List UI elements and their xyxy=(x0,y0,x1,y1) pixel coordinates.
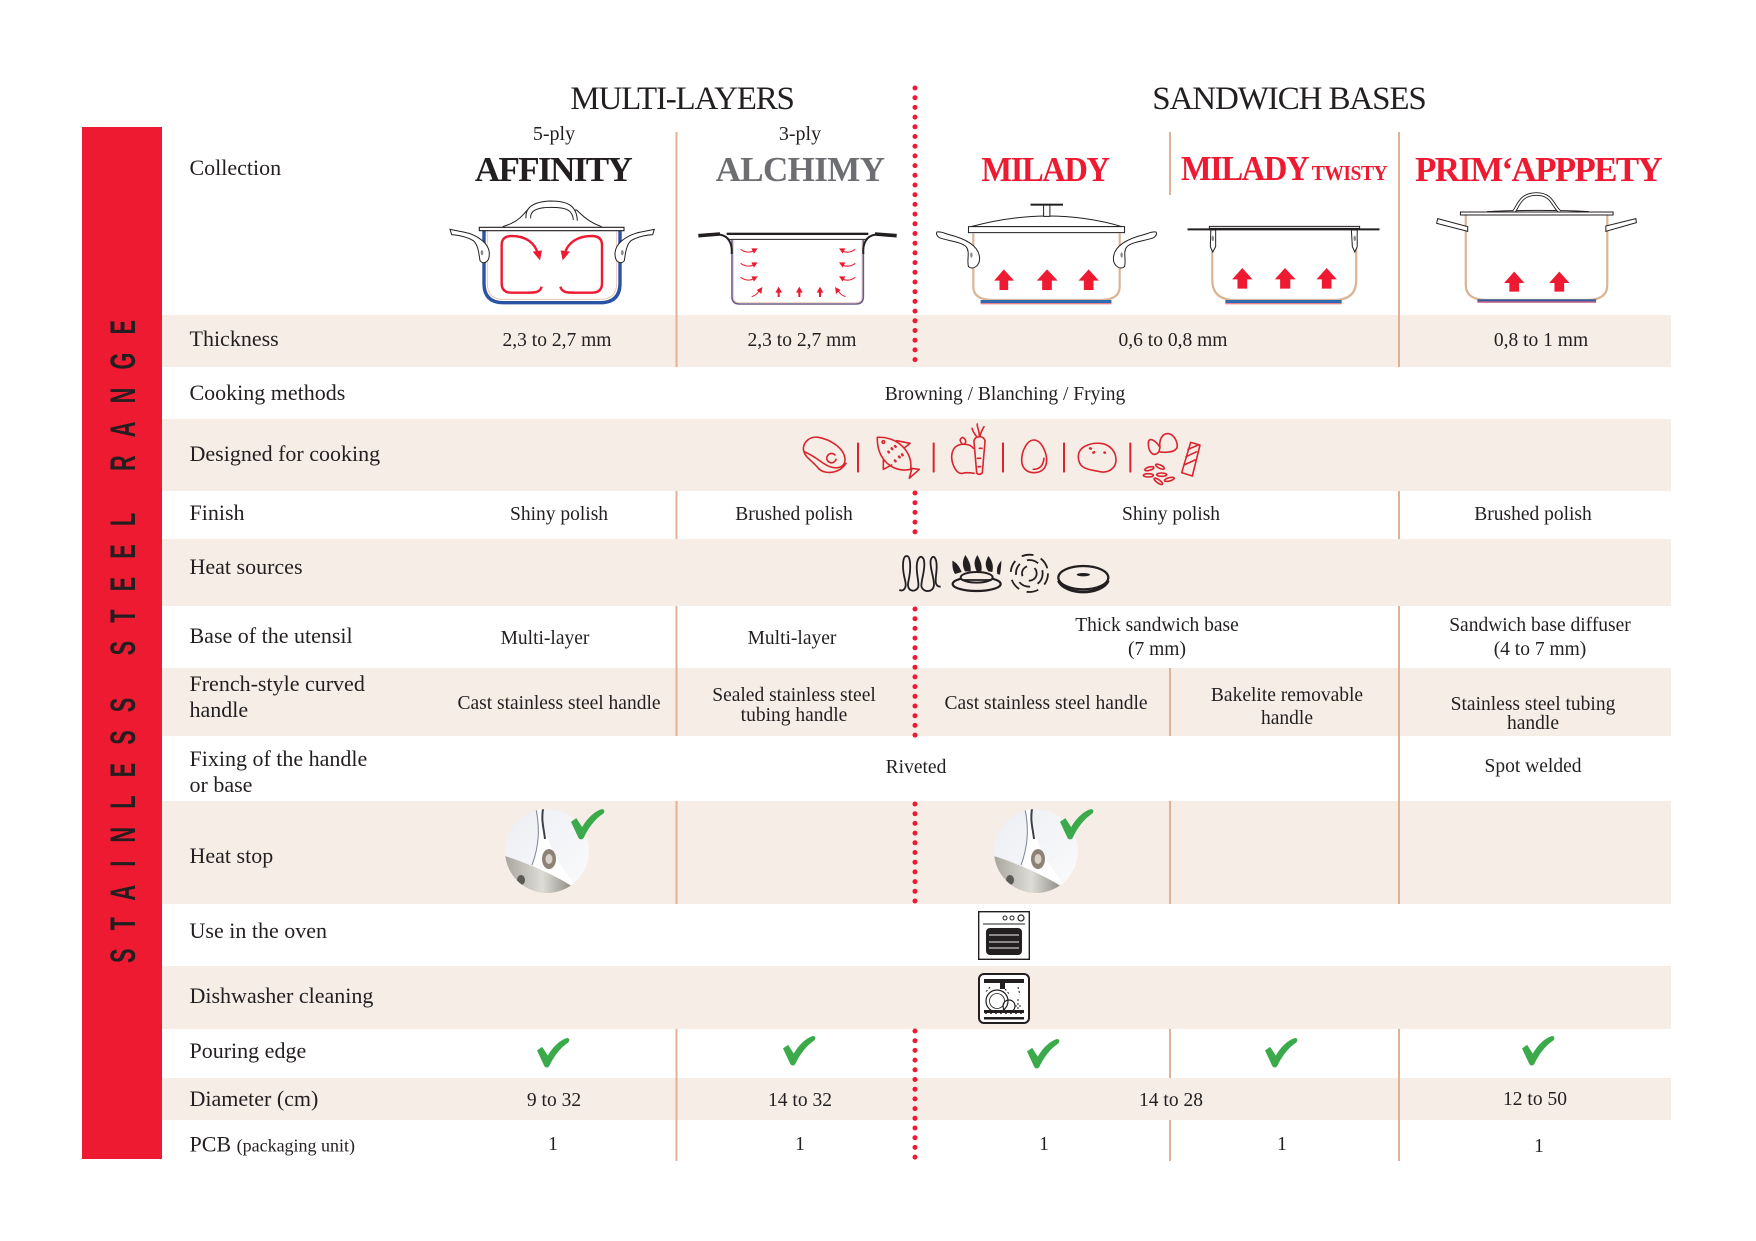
base: affinity: Multi-layer xyxy=(501,628,589,649)
icon: solid plate xyxy=(1058,566,1108,592)
food icons xyxy=(802,423,1201,486)
check: heat stop affinity xyxy=(571,809,604,840)
label: french-style curved handle: French-style curved xyxy=(190,671,365,696)
check: pouring edge affinity xyxy=(537,1038,570,1068)
fixing: spot welded: Spot welded xyxy=(1485,756,1581,777)
handle: prim'apppety xyxy=(1451,694,1615,734)
brand: alchimy: ALCHIMY xyxy=(716,150,884,189)
heat source icons xyxy=(899,554,1110,594)
pots: sandwich base illustrations xyxy=(936,192,1637,304)
base: milady xyxy=(1075,615,1239,660)
photo: heat stop milady xyxy=(994,809,1078,893)
sub-heading: 3-ply: 3-ply xyxy=(779,123,821,145)
sub-heading: 5-ply: 5-ply xyxy=(533,123,575,145)
row band: thickness xyxy=(162,315,1671,367)
check: pouring edge milady xyxy=(1027,1039,1060,1068)
row band: heat stop xyxy=(162,801,1671,904)
handle: alchimy: Sealed stainless steel xyxy=(712,685,876,706)
pcb: affinity: 1 xyxy=(548,1134,558,1155)
fixing: riveted: Riveted xyxy=(886,757,946,778)
row band: french-style curved handle xyxy=(162,668,1671,736)
thickness: alchimy: 2,3 to 2,7 mm xyxy=(748,330,856,351)
side banner: stainless steel range: STAINLESS STEEL RANGE xyxy=(105,320,143,963)
diameter: prim'apppety: 12 to 50 xyxy=(1503,1089,1567,1110)
check: pouring edge milady twisty xyxy=(1265,1038,1298,1068)
pcb: milady: 1 xyxy=(1039,1134,1049,1155)
icon: apple and carrot xyxy=(952,424,985,474)
handle: prim'apppety: Stainless steel tubing xyxy=(1451,694,1615,715)
base: milady: (7 mm) xyxy=(1128,639,1186,660)
diameter: alchimy: 14 to 32 xyxy=(768,1090,832,1111)
thickness: affinity: 2,3 to 2,7 mm xyxy=(503,330,611,351)
finish: affinity: Shiny polish xyxy=(510,504,608,525)
brand: prim'apppety: PRIM‘APPPETY xyxy=(1415,150,1661,189)
pot: affinity xyxy=(450,201,654,303)
brand: milady twisty: MILADY TWISTY xyxy=(1181,149,1387,188)
label: pcb packaging unit: PCB (packaging unit) xyxy=(190,1132,355,1156)
handle: alchimy: tubing handle xyxy=(741,705,847,726)
label: fixing of the handle or base xyxy=(190,746,367,797)
base: prim'apppety xyxy=(1449,615,1631,660)
icon: potato xyxy=(1078,443,1116,472)
icon: gas burner xyxy=(952,555,1001,591)
icon: electric coil xyxy=(899,556,941,591)
photo: heat stop affinity xyxy=(505,809,589,893)
base: prim'apppety: Sandwich base diffuser xyxy=(1449,615,1631,636)
check: pouring edge alchimy xyxy=(783,1036,816,1066)
base: milady: Thick sandwich base xyxy=(1075,615,1239,636)
label: french-style curved handle: handle xyxy=(190,697,248,722)
finish: prim'apppety: Brushed polish xyxy=(1474,504,1592,525)
icon: pasta xyxy=(1143,434,1200,486)
label: use in the oven: Use in the oven xyxy=(190,918,327,943)
icon: fish xyxy=(877,437,919,478)
pot: alchimy xyxy=(698,233,897,304)
pcb: milady twisty: 1 xyxy=(1277,1134,1287,1155)
label: cooking methods: Cooking methods xyxy=(190,380,345,405)
label: heat sources: Heat sources xyxy=(190,554,303,579)
handle: milady twisty: handle xyxy=(1261,708,1313,729)
icon: egg xyxy=(1022,440,1047,473)
diameter: milady: 14 to 28 xyxy=(1139,1090,1203,1111)
icon: radiant hob xyxy=(1011,555,1048,592)
pot: milady twisty xyxy=(1188,226,1379,304)
cooking methods value: Browning / Blanching / Frying xyxy=(885,384,1125,405)
row band: heat sources xyxy=(162,539,1671,606)
label: heat stop: Heat stop xyxy=(190,843,273,868)
icon: separators xyxy=(858,443,1130,472)
label: pouring edge: Pouring edge xyxy=(190,1038,306,1063)
heading: multi-layers: MULTI-LAYERS xyxy=(570,81,794,117)
finish: milady: Shiny polish xyxy=(1122,504,1220,525)
pcb: prim'apppety: 1 xyxy=(1534,1136,1544,1157)
brand: milady: MILADY xyxy=(981,150,1109,189)
handle: milady twisty xyxy=(1211,685,1363,729)
label: thickness: Thickness xyxy=(190,326,279,351)
label: french-style curved handle xyxy=(190,671,365,722)
row band: dishwasher cleaning xyxy=(162,966,1671,1029)
handle: milady twisty: Bakelite removable xyxy=(1211,685,1363,706)
thickness: milady: 0,6 to 0,8 mm xyxy=(1119,330,1227,351)
base: prim'apppety: (4 to 7 mm) xyxy=(1494,639,1586,660)
pot: prim'apppety xyxy=(1437,194,1636,303)
label: designed for cooking: Designed for cooking xyxy=(190,441,380,466)
base: alchimy: Multi-layer xyxy=(748,628,836,649)
icon: meat xyxy=(803,437,846,472)
label: diameter: Diameter (cm) xyxy=(190,1086,318,1111)
pots: multi-layer illustrations xyxy=(449,200,897,305)
handle: alchimy xyxy=(712,685,876,726)
icon: dishwasher xyxy=(978,973,1030,1024)
check: pouring edge prim'apppety xyxy=(1522,1036,1554,1066)
diameter: affinity: 9 to 32 xyxy=(527,1090,581,1111)
row band: diameter xyxy=(162,1078,1671,1120)
side banner: stainless steel range xyxy=(82,127,162,1159)
icon: oven xyxy=(978,911,1030,960)
brand: affinity: AFFINITY xyxy=(475,150,631,189)
row band: designed for cooking xyxy=(162,419,1671,491)
handle: prim'apppety: handle xyxy=(1507,713,1559,734)
label: fixing of the handle or base: or base xyxy=(190,772,252,797)
label: fixing of the handle or base: Fixing of the handle xyxy=(190,746,367,771)
pcb: alchimy: 1 xyxy=(795,1134,805,1155)
thickness: prim'apppety: 0,8 to 1 mm xyxy=(1494,330,1588,351)
heading: sandwich bases: SANDWICH BASES xyxy=(1152,81,1426,117)
handle: affinity: Cast stainless steel handle xyxy=(457,693,661,714)
handle: milady: Cast stainless steel handle xyxy=(944,693,1148,714)
finish: alchimy: Brushed polish xyxy=(735,504,853,525)
label: base of the utensil: Base of the utensil xyxy=(190,623,353,648)
pot: milady xyxy=(937,204,1156,304)
label: dishwasher cleaning: Dishwasher cleaning xyxy=(190,983,373,1008)
check: heat stop milady xyxy=(1060,809,1094,840)
label: finish: Finish xyxy=(190,500,245,525)
label: collection: Collection xyxy=(190,155,281,180)
